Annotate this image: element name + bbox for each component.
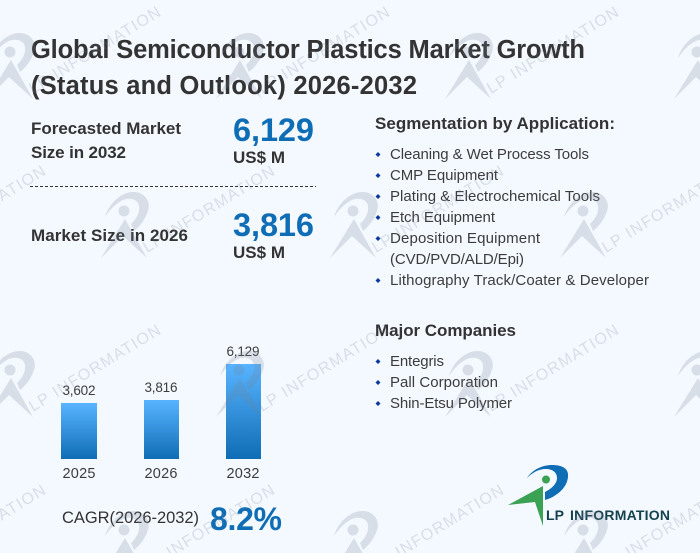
logo arc (527, 465, 568, 500)
companies list: Entegris (390, 353, 444, 370)
companies list: Shin-Etsu Polymer (390, 395, 512, 412)
value 2025: 3,602 (62, 383, 96, 398)
logo text: LP (546, 507, 564, 523)
year 2026: 2026 (144, 466, 178, 482)
value 2032: 6,129 (226, 344, 260, 359)
segmentation list: Lithography Track/Coater & Developer (390, 272, 649, 289)
logo arrow (508, 486, 543, 526)
logo (508, 465, 670, 526)
market size value: 3,816 (233, 207, 314, 243)
market size value (233, 207, 314, 262)
forecast label: Forecasted Market (31, 119, 181, 138)
watermark pattern: LP INFORMATION (26, 4, 164, 97)
bar 2026 (144, 400, 179, 459)
watermark pattern: LP INFORMATION (140, 163, 278, 256)
forecast label (31, 119, 181, 162)
segmentation heading: Segmentation by Application: (375, 114, 615, 133)
bar 2032 (226, 364, 261, 459)
watermark pattern: LP INFORMATION (255, 4, 393, 97)
companies list (376, 353, 512, 412)
divider (30, 186, 316, 188)
title: Global Semiconductor Plastics Market Growth (31, 36, 585, 64)
segmentation list: (CVD/PVD/ALD/Epi) (390, 251, 524, 268)
segmentation list: Cleaning & Wet Process Tools (390, 146, 589, 163)
forecast label: Size in 2032 (31, 143, 126, 162)
watermark pattern: LP INFORMATION (369, 163, 507, 256)
watermark pattern: LP INFORMATION (484, 322, 622, 415)
CAGR: CAGR(2026-2032) (62, 509, 199, 527)
title (31, 36, 585, 100)
market size label: Market Size in 2026 (31, 226, 188, 245)
segmentation list: Plating & Electrochemical Tools (390, 188, 600, 205)
year 2032: 2032 (226, 466, 260, 482)
year 2025: 2025 (62, 466, 96, 482)
watermark pattern: LP INFORMATION (26, 322, 164, 415)
title: (Status and Outlook) 2026-2032 (31, 72, 417, 100)
segmentation list (376, 146, 649, 289)
logo dot (542, 476, 550, 484)
market size value: US$ M (233, 243, 285, 262)
watermark pattern: LP INFORMATION (484, 4, 622, 97)
segmentation list: Deposition Equipment (390, 230, 541, 247)
value 2026: 3,816 (144, 380, 178, 395)
CAGR: 8.2% (210, 501, 282, 537)
segmentation list: CMP Equipment (390, 167, 499, 184)
watermark pattern: LP INFORMATION (255, 322, 393, 415)
forecast value: 6,129 (233, 112, 314, 148)
segmentation list: Etch Equipment (390, 209, 496, 226)
logo text: INFORMATION (570, 507, 670, 523)
forecast value: US$ M (233, 148, 285, 167)
forecast value (233, 112, 314, 167)
companies heading: Major Companies (375, 321, 516, 340)
CAGR (62, 501, 282, 537)
bar chart (61, 344, 261, 482)
bar 2025 (61, 403, 97, 459)
companies list: Pall Corporation (390, 374, 498, 391)
